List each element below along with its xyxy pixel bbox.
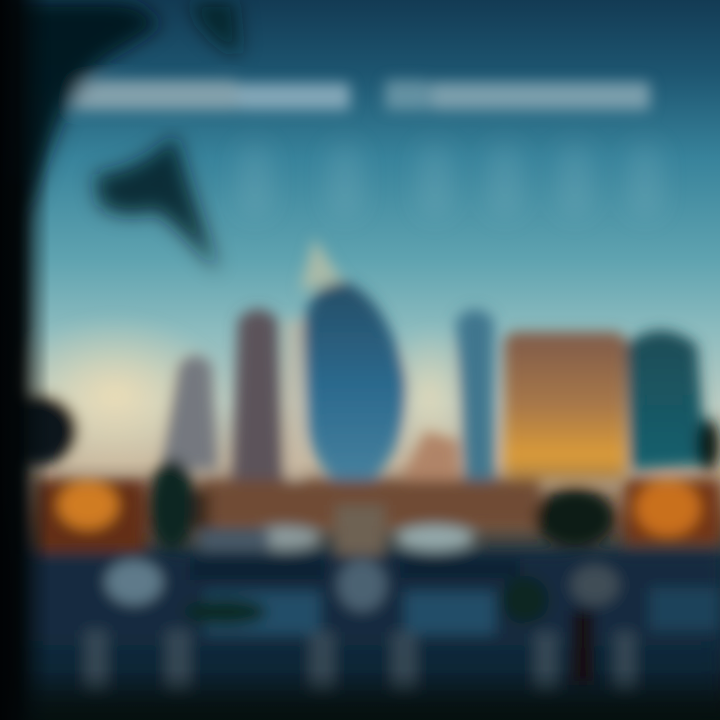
building: slim blue tower bbox=[456, 309, 494, 492]
water reflections bbox=[106, 559, 720, 634]
dark band under promenade bbox=[190, 560, 520, 580]
foreground palms and foliage bbox=[0, 394, 720, 685]
bottom shadow bbox=[0, 670, 720, 720]
palm silhouette top-left bbox=[0, 0, 240, 272]
building: mid orange low block bbox=[392, 430, 462, 510]
skyline buildings bbox=[160, 238, 707, 510]
building: pale light gap bbox=[285, 320, 303, 490]
title band (illegible in the reference) bbox=[72, 80, 650, 110]
building: far left tower bbox=[160, 355, 218, 470]
promenade lights bbox=[200, 505, 475, 555]
tree: right palm trunk bbox=[572, 610, 594, 685]
left orange glow bbox=[35, 480, 145, 552]
left trunk shadow bbox=[0, 180, 24, 720]
building: tall dark tower bbox=[232, 309, 284, 490]
tree: central-left dark tree bbox=[148, 459, 196, 551]
tree: right palm crown bbox=[535, 488, 615, 548]
lower reflection columns bbox=[85, 630, 635, 690]
building: central oval tower top bbox=[300, 238, 345, 290]
shrub: low right bbox=[501, 576, 549, 624]
tree: right edge bush bbox=[696, 419, 720, 471]
tree: left bush at horizon bbox=[0, 394, 78, 466]
faint subtitle columns bbox=[240, 145, 660, 215]
building: teal tower bbox=[626, 330, 707, 470]
lower dark ground and water bbox=[0, 554, 720, 720]
waterfront band bbox=[150, 480, 540, 530]
right orange glow bbox=[625, 480, 720, 544]
horizon glow bbox=[0, 315, 475, 475]
building: central oval tower bbox=[303, 282, 406, 494]
shrub: low centre-left bbox=[183, 598, 267, 626]
building: golden hotel bbox=[504, 332, 626, 480]
